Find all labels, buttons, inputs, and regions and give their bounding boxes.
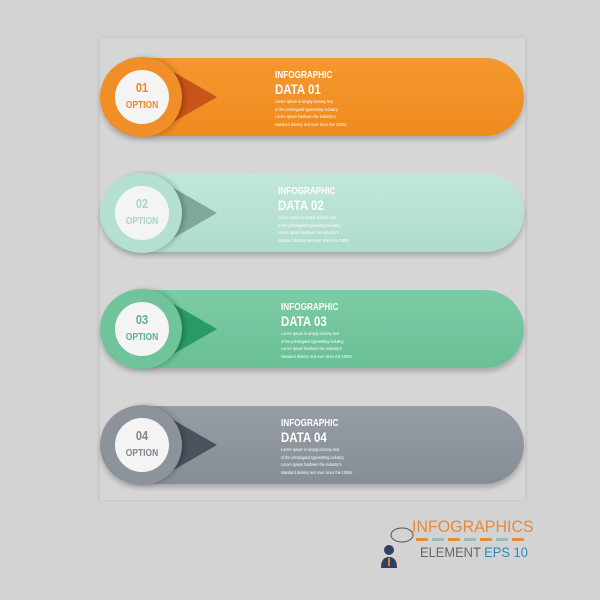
arrow 3 xyxy=(170,302,217,356)
circle 04: 04 xyxy=(136,428,148,443)
text 1: INFOGRAPHIC xyxy=(275,70,332,81)
circle 04 xyxy=(102,405,182,485)
circle 01: 01 xyxy=(136,80,148,95)
bar 4 gray xyxy=(100,406,524,484)
text 3: standard dummy text ever since the 1500s. xyxy=(281,354,353,358)
arrow 1 xyxy=(170,70,217,124)
arrow 4 xyxy=(170,418,217,472)
text 1 xyxy=(275,70,347,127)
text 2: of the printingand typesetting industry. xyxy=(278,222,341,228)
text 3 xyxy=(281,302,353,359)
logo: ELEMENT EPS 10 xyxy=(420,544,528,560)
circle 01: OPTION xyxy=(126,100,158,111)
text 3: Lorem Ipsum hasbeen the industry's xyxy=(281,346,342,351)
text 4 xyxy=(281,418,353,475)
bar 3 green xyxy=(100,290,524,368)
text 1: Lorem Ipsum hasbeen the industry's xyxy=(275,114,336,119)
text 1: DATA 01 xyxy=(275,81,321,97)
circle 04: OPTION xyxy=(126,448,158,459)
text 4: Lorem Ipsum is simply dummy text xyxy=(281,447,339,452)
text 3: INFOGRAPHIC xyxy=(281,302,338,313)
text 2: Lorem Ipsum hasbeen the industry's xyxy=(278,230,339,235)
logo xyxy=(381,517,534,568)
text 4: DATA 04 xyxy=(281,429,327,445)
icon: businessman xyxy=(381,528,414,568)
text 1: Lorem Ipsum is simply dummy text xyxy=(275,99,333,104)
text 2: Lorem Ipsum is simply dummy text xyxy=(278,215,336,220)
text 4: standard dummy text ever since the 1500s. xyxy=(281,470,353,474)
circle 02: OPTION xyxy=(126,216,158,227)
text 4: of the printingand typesetting industry. xyxy=(281,454,344,460)
text 4: Lorem Ipsum hasbeen the industry's xyxy=(281,462,342,467)
circle 03: 03 xyxy=(136,312,148,327)
bar 1 orange xyxy=(100,58,524,136)
text 1: of the printingand typesetting industry. xyxy=(275,106,338,112)
circle 02: 02 xyxy=(136,196,148,211)
text 2 xyxy=(278,186,350,243)
text 2: INFOGRAPHIC xyxy=(278,186,335,197)
circle 02 xyxy=(102,173,182,253)
text 4: INFOGRAPHIC xyxy=(281,418,338,429)
circle 03 xyxy=(102,289,182,369)
brand text: INFOGRAPHICS xyxy=(412,517,534,536)
arrow 2 xyxy=(170,186,217,240)
text 3: DATA 03 xyxy=(281,313,327,329)
text 3: Lorem Ipsum is simply dummy text xyxy=(281,331,339,336)
bar 2 mint xyxy=(100,174,524,252)
circle 01 xyxy=(102,57,182,137)
text 2: DATA 02 xyxy=(278,197,324,213)
text 3: of the printingand typesetting industry. xyxy=(281,338,344,344)
text 1: standard dummy text ever since the 1500s. xyxy=(275,122,347,126)
circle 03: OPTION xyxy=(126,332,158,343)
text 2: standard dummy text ever since the 1500s. xyxy=(278,238,350,242)
